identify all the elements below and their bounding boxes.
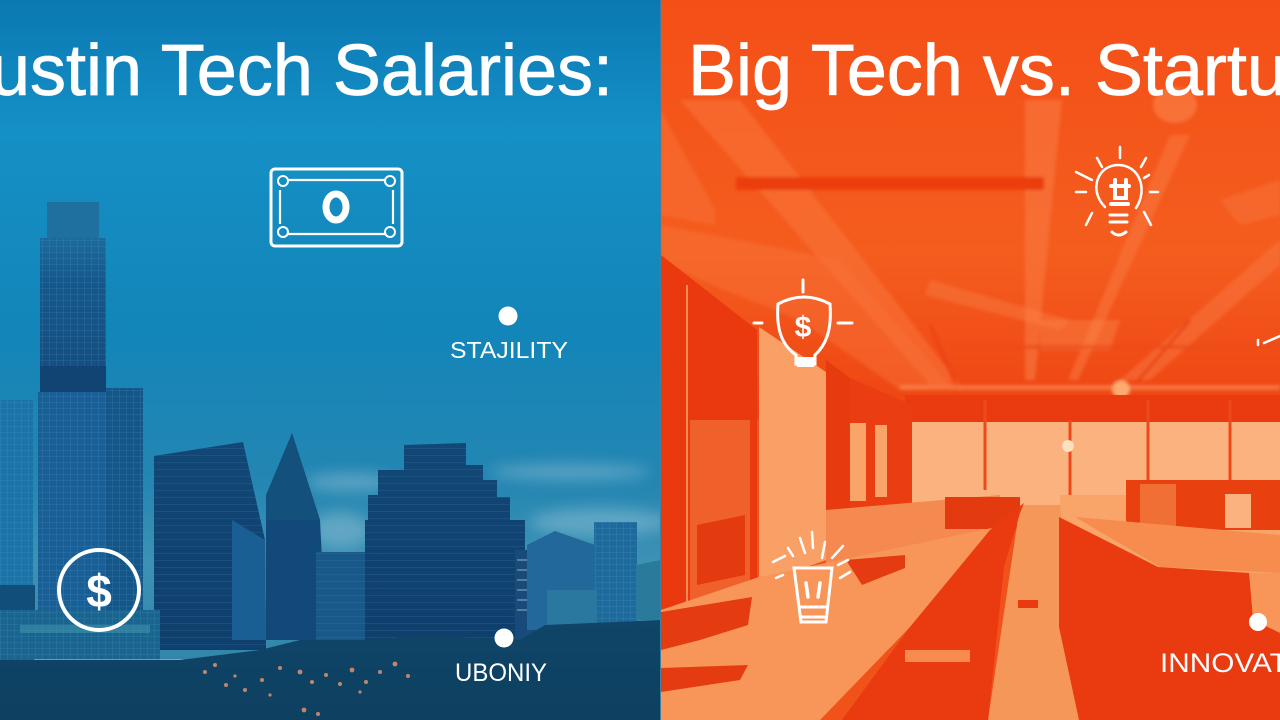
back wall windows bbox=[905, 395, 1280, 512]
innovation marker bbox=[1162, 613, 1280, 672]
icon: dollar coin bbox=[59, 550, 139, 630]
icon: spark cup bbox=[773, 532, 850, 622]
innovation marker: INNOVATI bbox=[1160, 648, 1280, 678]
icon: dollar coin: $ bbox=[86, 565, 112, 617]
big desk bbox=[661, 528, 992, 720]
sky background bbox=[0, 82, 660, 660]
economy marker bbox=[456, 628, 546, 681]
icon: dollar bulb left: $ bbox=[795, 311, 812, 344]
office base fill bbox=[757, 420, 1280, 720]
clouds near horizon bbox=[305, 464, 670, 548]
stability marker bbox=[451, 306, 568, 358]
stability marker: STAJILITY bbox=[450, 337, 568, 363]
desk items bbox=[661, 555, 905, 692]
economy marker: UBONIY bbox=[455, 659, 547, 687]
panel: startup office (orange) bbox=[661, 0, 1280, 720]
panel: Austin skyline (blue) bbox=[0, 0, 670, 720]
divider strip bbox=[660, 0, 662, 720]
icon: dollar bulb left bbox=[754, 280, 852, 367]
icon: light bulb top bbox=[1076, 147, 1158, 235]
center floor bbox=[988, 505, 1079, 720]
ceiling background bbox=[661, 199, 1280, 420]
left wall glass and column bbox=[661, 255, 1000, 640]
icon: dollar bill bbox=[271, 169, 402, 246]
skyline buildings bbox=[0, 202, 661, 682]
foreground trees with lights bbox=[0, 620, 661, 720]
office chairs bbox=[842, 503, 1280, 720]
right desk and background bbox=[1060, 480, 1280, 633]
ceiling beams and ducts bbox=[661, 87, 1280, 398]
rear furniture bbox=[945, 497, 1020, 529]
partial bulb icon at right edge bbox=[1258, 336, 1280, 345]
